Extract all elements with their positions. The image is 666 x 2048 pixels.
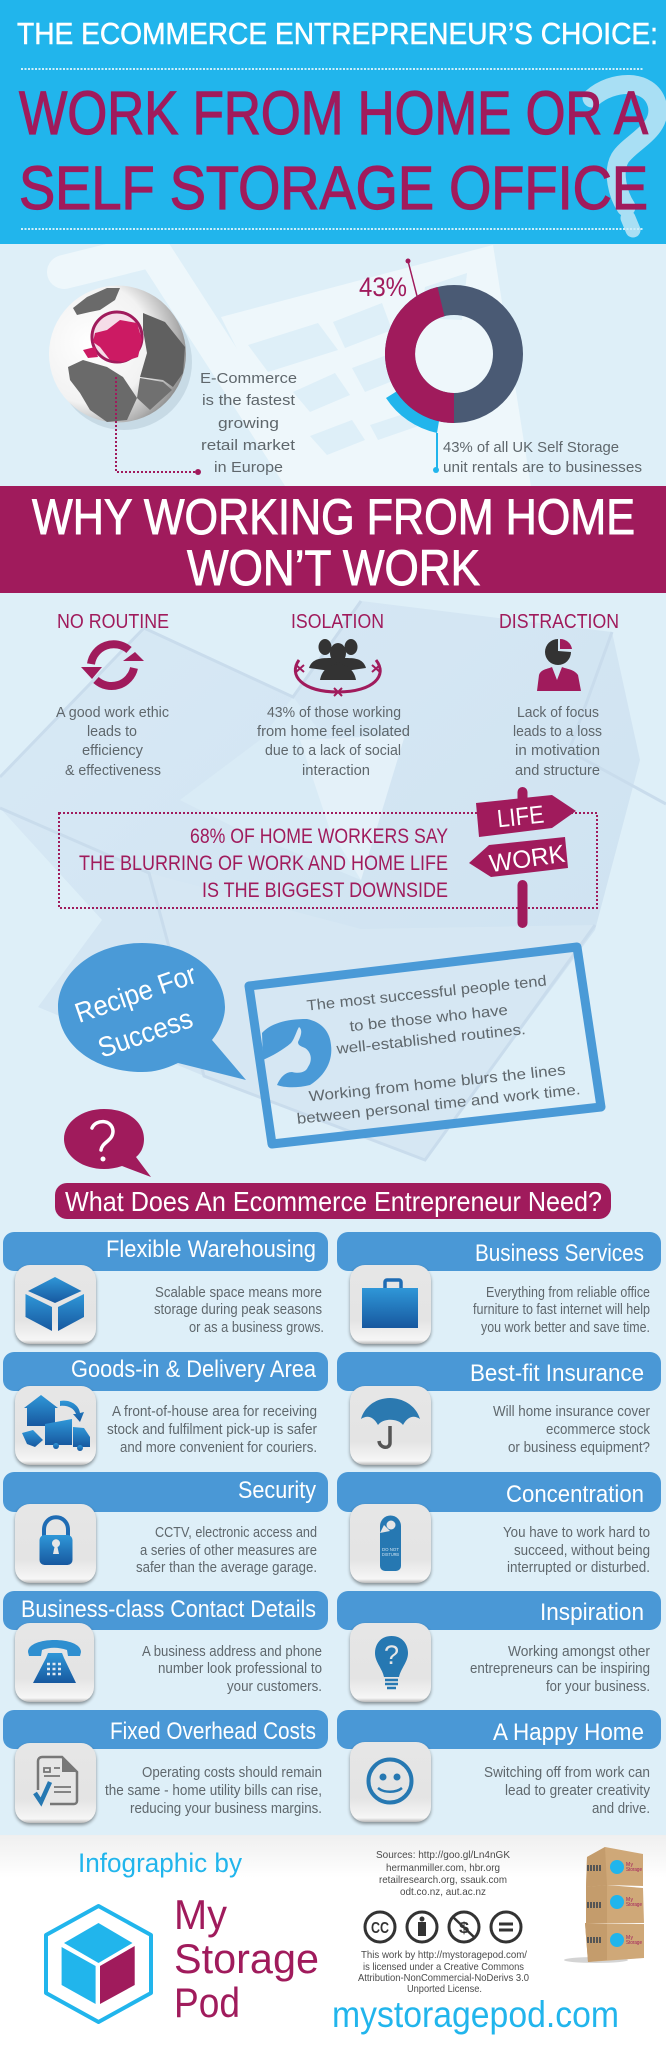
card title: Concentration [506, 1481, 644, 1508]
icon tile [15, 1623, 94, 1702]
icon tile [350, 1504, 431, 1583]
sources [376, 1849, 510, 1898]
icon: umbrella [361, 1398, 420, 1447]
license text: Attribution-NonCommercial-NoDerivs 3.0 [358, 1972, 529, 1984]
callout text: THE BLURRING OF WORK AND HOME LIFE [79, 852, 448, 875]
value label: 43% [359, 272, 407, 302]
body text: and structure [515, 762, 600, 779]
icon: smiley [368, 1760, 412, 1802]
card title: Security [238, 1477, 316, 1504]
icon tile [350, 1623, 431, 1702]
callout: blurring of work and home life [59, 792, 597, 923]
icon tile [15, 1386, 96, 1465]
card title: Business-class Contact Details [21, 1596, 316, 1623]
card text: or as a business grows. [189, 1320, 324, 1336]
dotted rule lower [21, 228, 644, 230]
icon: isolated group in barbed wire [295, 639, 380, 696]
card: goods-in and delivery area [3, 1352, 328, 1465]
body text: leads to [87, 723, 137, 740]
card text: for your business. [546, 1679, 650, 1695]
card text [503, 1525, 650, 1576]
card: fixed overhead costs [3, 1710, 328, 1823]
card text: A business address and phone [142, 1644, 322, 1660]
icon: stacked cardboard boxes [564, 1847, 644, 1963]
card: flexible warehousing [3, 1232, 328, 1344]
icon tile [350, 1742, 431, 1822]
body text: efficiency [82, 742, 143, 759]
globe caption: retail market [201, 437, 296, 454]
infographic by: Infographic by [78, 1848, 242, 1878]
icon: briefcase [362, 1280, 418, 1328]
donut chart [385, 287, 508, 423]
card text [470, 1644, 650, 1695]
icon: door hanger: DISTURB [382, 1552, 399, 1557]
speech bubble: recipe for success: Success [94, 1003, 197, 1064]
pointer [408, 261, 417, 296]
body text [56, 704, 169, 779]
icon: signpost [469, 792, 576, 923]
icon: question lightbulb: ? [384, 1640, 399, 1670]
card text: a series of other measures are [140, 1543, 317, 1559]
icon: signpost: WORK [488, 840, 567, 878]
donut caption: 43% of all UK Self Storage [443, 439, 619, 456]
icons: creative commons badges: CC [371, 1920, 389, 1937]
card text: Switching off from work can [484, 1765, 650, 1781]
body text: from home feel isolated [257, 723, 410, 740]
leader dot [195, 469, 201, 475]
frame text: between personal time and work time. [296, 1081, 581, 1128]
dotted leader [116, 377, 198, 472]
license text: is licensed under a Creative Commons [363, 1961, 524, 1973]
logo wordmark [174, 1891, 319, 2026]
heading: DISTRACTION [499, 611, 619, 633]
card text: Operating costs should remain [142, 1765, 322, 1781]
body text: 43% of those working [267, 704, 401, 721]
icon: telephone [28, 1640, 81, 1683]
card text [142, 1644, 322, 1695]
icon: stacked cardboard boxes: Storage [626, 1940, 642, 1946]
frame text: Working from home blurs the lines [308, 1062, 566, 1105]
card text: entrepreneurs can be inspiring [470, 1661, 650, 1677]
icon: house and truck [22, 1395, 90, 1451]
heading pill: what does an ecommerce entrepreneur need: What Does An Ecommerce Entrepreneur Need? [65, 1186, 602, 1217]
body text: in motivation [515, 742, 600, 759]
card text: number look professional to [158, 1661, 322, 1677]
card text [136, 1525, 317, 1576]
website url: mystoragepod.com [332, 1994, 619, 2035]
icon: question bubble [64, 1109, 151, 1177]
logo wordmark: My [174, 1891, 227, 1938]
card text: A front-of-house area for receiving [112, 1404, 317, 1420]
icon: person with chart head [537, 639, 581, 691]
card text: the same - home utility bills can rise, [105, 1783, 322, 1799]
callout text: IS THE BIGGEST DOWNSIDE [202, 879, 448, 902]
card text: and drive. [592, 1801, 650, 1817]
icon: checklist document [35, 1757, 77, 1804]
body text: leads to a loss [513, 723, 602, 740]
icon: question lightbulb [375, 1636, 408, 1688]
frame text: The most successful people tend [306, 972, 547, 1015]
globe caption [200, 370, 297, 476]
frame text: to be those who have [349, 1002, 509, 1035]
icon: stacked cardboard boxes: My [626, 1897, 634, 1903]
card: concentration [337, 1472, 661, 1583]
panel: no routine [56, 611, 169, 779]
card text [105, 1765, 322, 1817]
card text [473, 1285, 650, 1336]
panel: isolation [257, 611, 410, 779]
icon: globe [49, 286, 192, 430]
header panel [0, 0, 666, 244]
icons: creative commons badges: $ [459, 1920, 469, 1937]
background: cardboard box shapes [0, 601, 666, 1160]
icon: thumbs up [262, 1019, 331, 1087]
panel: recipe frame [249, 947, 601, 1144]
card: a happy home [337, 1710, 661, 1822]
speech bubble: recipe for success [58, 943, 246, 1080]
card title: A Happy Home [493, 1719, 644, 1746]
icon: stacked cardboard boxes: My [626, 1862, 634, 1868]
speech bubble: recipe for success: Recipe For [71, 958, 200, 1029]
card text [107, 1404, 317, 1456]
pointer dot [406, 258, 410, 264]
big pale question mark [592, 84, 658, 230]
card text: succeed, without being [514, 1543, 650, 1559]
card title: Goods-in & Delivery Area [71, 1356, 317, 1383]
card text: stock and fulfilment pick-up is safer [107, 1422, 317, 1438]
icon tile [350, 1386, 431, 1465]
icon: door hanger [380, 1516, 401, 1571]
dotted rule [21, 68, 644, 70]
license text: Unported License. [407, 1983, 482, 1995]
callout text: 68% OF HOME WORKERS SAY [190, 825, 448, 848]
icon: signpost: LIFE [496, 801, 545, 833]
body text: & effectiveness [65, 762, 161, 779]
body text: Lack of focus [517, 704, 599, 721]
card text: storage during peak seasons [154, 1302, 322, 1318]
license text: This work by http://mystoragepod.com/ [361, 1949, 527, 1961]
heading: NO ROUTINE [57, 611, 169, 633]
body text: A good work ethic [56, 704, 169, 721]
frame text: well-established routines. [335, 1021, 527, 1058]
icon: stacked cardboard boxes: Storage [626, 1867, 642, 1873]
body text [257, 704, 410, 779]
card: best-fit insurance [337, 1352, 661, 1465]
globe stat [49, 286, 297, 476]
card text: reducing your business margins. [130, 1801, 322, 1817]
accent arc [386, 388, 440, 433]
footer panel [0, 1835, 666, 2048]
card text: Will home insurance cover [493, 1404, 650, 1420]
icon tile [15, 1265, 96, 1344]
card text: and more convenient for couriers. [120, 1440, 317, 1456]
card text [484, 1765, 651, 1817]
card title: Best-fit Insurance [470, 1360, 644, 1387]
sources: odt.co.nz, aut.ac.nz [400, 1886, 486, 1898]
icon tile [15, 1504, 96, 1583]
license text [358, 1949, 529, 1995]
icon: stacked cardboard boxes: My [626, 1935, 634, 1941]
donut caption: unit rentals are to businesses [443, 459, 642, 476]
logo wordmark: Storage [174, 1935, 319, 1982]
card: security [3, 1472, 328, 1583]
card title: Business Services [475, 1240, 644, 1267]
sources: hermanmiller.com, hbr.org [386, 1862, 500, 1874]
icon tile [15, 1743, 96, 1823]
background: shopping cart [64, 245, 531, 487]
icons: creative commons badges [365, 1912, 521, 1942]
card: inspiration [337, 1591, 661, 1702]
donut chart stat [359, 258, 642, 476]
heading: ISOLATION [291, 611, 384, 633]
icon: cube [26, 1277, 84, 1331]
banner: why working from home [0, 486, 666, 596]
sources: retailresearch.org, ssauk.com [379, 1874, 507, 1886]
logo icon: hexagon cube [46, 1906, 151, 2022]
card text [154, 1285, 324, 1336]
blue leader [436, 433, 438, 470]
panel: distraction [499, 611, 619, 779]
card text: You have to work hard to [503, 1525, 650, 1541]
globe caption: growing [218, 415, 279, 432]
card text: CCTV, electronic access and [155, 1525, 317, 1541]
card title: Inspiration [540, 1599, 644, 1626]
card text: ecommerce stock [546, 1422, 651, 1438]
card text: your customers. [227, 1679, 322, 1695]
icon: door hanger: DO NOT [382, 1547, 399, 1552]
globe caption: E-Commerce [200, 370, 297, 387]
card title: Fixed Overhead Costs [110, 1718, 316, 1745]
sources: Sources: http://goo.gl/Ln4nGK [376, 1849, 510, 1861]
card: business-class contact details [3, 1591, 328, 1702]
banner line 2: WON’T WORK [187, 540, 480, 596]
body text [513, 704, 602, 779]
card text: Scalable space means more [155, 1285, 322, 1301]
icon tile [350, 1265, 431, 1344]
icon: refresh arrows [81, 644, 144, 686]
globe caption: is the fastest [202, 392, 296, 409]
card text: interrupted or disturbed. [507, 1560, 650, 1576]
card text: or business equipment? [508, 1440, 650, 1456]
icon: stacked cardboard boxes: Storage [626, 1902, 642, 1908]
card text: safer than the average garage. [136, 1560, 317, 1576]
card text [493, 1404, 651, 1456]
frame text [296, 972, 581, 1128]
globe caption: in Europe [214, 459, 283, 476]
blue dot [433, 467, 439, 473]
body text: due to a lack of social [265, 742, 401, 759]
callout text [79, 825, 448, 902]
card: business services [337, 1232, 661, 1344]
donut caption [443, 439, 642, 476]
card text: lead to greater creativity [505, 1783, 651, 1799]
card title: Flexible Warehousing [106, 1236, 316, 1263]
icon: padlock [40, 1517, 72, 1565]
body text: interaction [302, 762, 370, 779]
logo wordmark: Pod [174, 1979, 240, 2026]
card text: Working amongst other [508, 1644, 650, 1660]
